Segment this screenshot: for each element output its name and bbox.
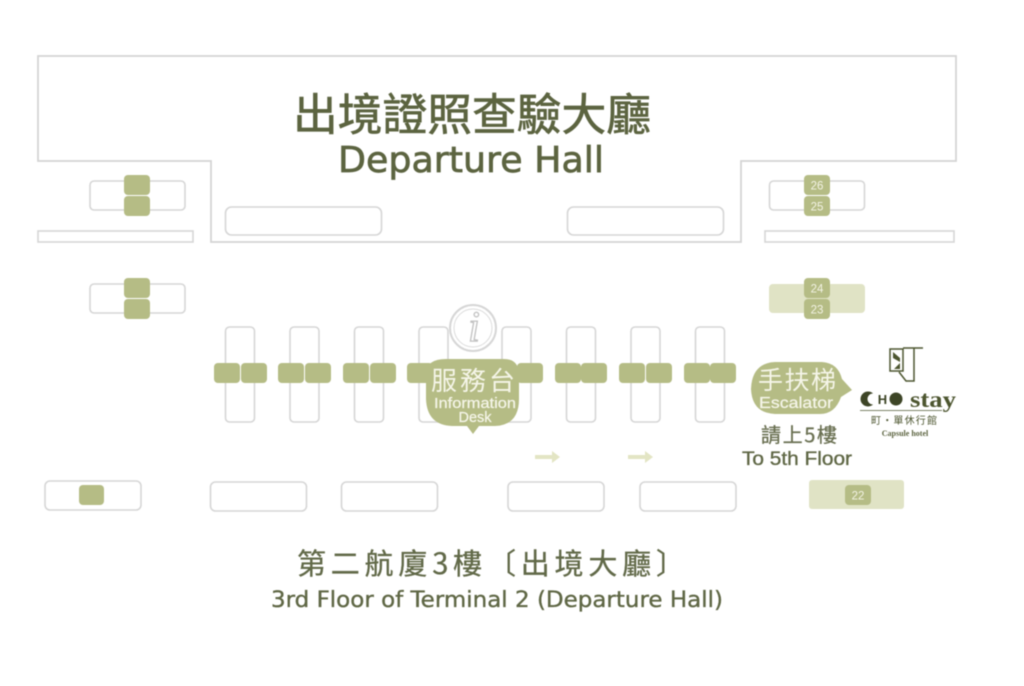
callout: information desk: Desk [458, 410, 492, 426]
icon: information [450, 304, 496, 351]
gates 26 and 25: 26 [811, 180, 823, 192]
gate 22 [809, 480, 904, 509]
text: to 5th floor: 請上5樓 [761, 419, 837, 448]
logo: cho stay capsule hotel [860, 348, 957, 438]
gates 26 and 25 [770, 175, 864, 216]
gates 24 and 23: 23 [811, 304, 823, 316]
gates 24 and 23: 24 [811, 284, 824, 296]
central check-in islands [214, 327, 736, 422]
callout: escalator [751, 361, 852, 414]
bottom counters [45, 481, 736, 511]
logo: cho stay capsule hotel: stay [910, 387, 957, 412]
footer title: 第二航廈3樓〔出境大廳〕 [297, 541, 685, 583]
icon: information: i [468, 304, 480, 351]
title [293, 79, 651, 181]
gates 24 and 23 [769, 278, 865, 319]
left counters upper [90, 175, 185, 216]
logo: cho stay capsule hotel: H [878, 392, 887, 407]
footer title: 3rd Floor of Terminal 2 (Departure Hall) [271, 588, 723, 613]
text: to 5th floor [742, 419, 853, 470]
text: to 5th floor: To 5th Floor [742, 449, 853, 470]
callout: escalator: 手扶梯 [758, 361, 836, 397]
callout: information desk: 服務台 [431, 361, 515, 398]
title: Departure Hall [338, 140, 604, 181]
hall counters [226, 207, 724, 235]
gates 26 and 25: 25 [811, 202, 823, 214]
gate 22: 22 [852, 490, 864, 502]
logo: cho stay capsule hotel: Capsule hotel [882, 429, 929, 438]
side walls [38, 231, 954, 242]
departure hall outline [38, 56, 956, 242]
logo: cho stay capsule hotel: 町・單休行館 [871, 412, 937, 427]
callout: information desk [426, 359, 519, 434]
footer title [271, 541, 723, 613]
title: 出境證照查驗大廳 [293, 79, 651, 143]
left counters lower [90, 278, 185, 319]
callout: escalator: Escalator [759, 395, 834, 412]
callout: information desk: Information [434, 396, 516, 412]
arrows [535, 451, 653, 463]
